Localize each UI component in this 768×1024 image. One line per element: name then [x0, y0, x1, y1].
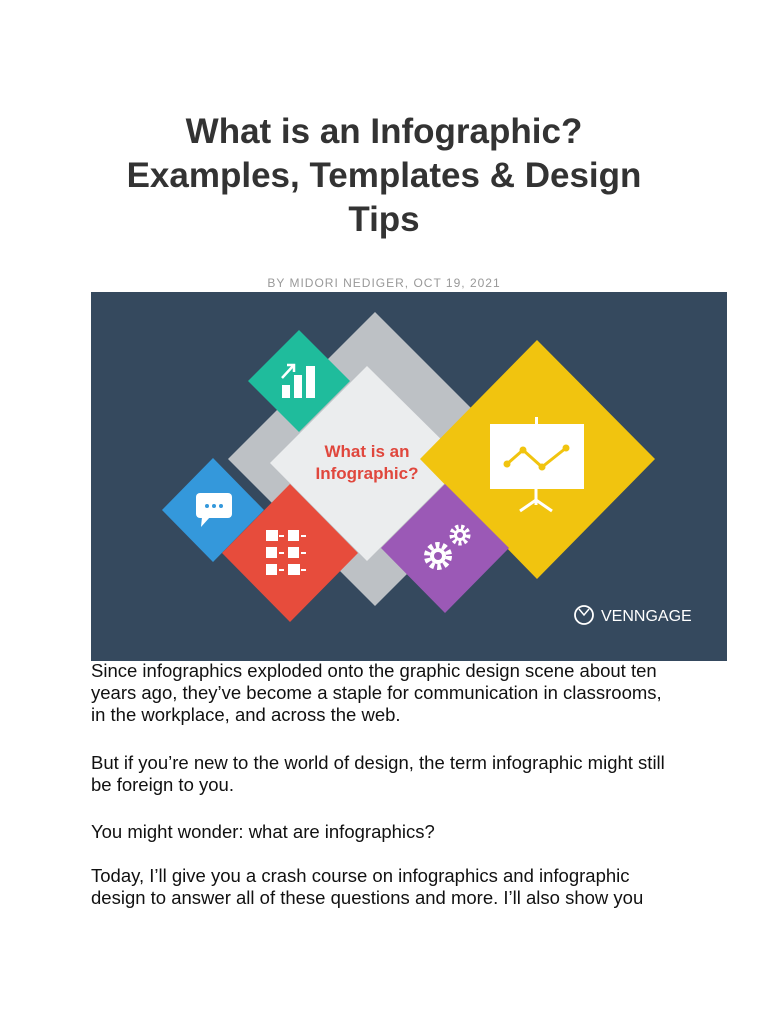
blue diamond with chat icon — [162, 458, 264, 562]
paragraph 3: You might wonder: what are infographics? — [91, 821, 435, 842]
title — [127, 112, 641, 239]
yellow diamond with presentation icon — [420, 340, 655, 579]
byline: BY MIDORI NEDIGER, OCT 19, 2021 — [267, 276, 501, 290]
paragraph 4: Today, I’ll give you a crash course on infographics and infographic design to answer all of these questions and more. I’ll also show you — [91, 865, 643, 908]
venngage logo: VENNGAGE — [601, 608, 692, 625]
title: Tips — [348, 200, 420, 239]
paragraph 2: But if you’re new to the world of design, the term infographic might still be foreign to you. — [91, 752, 665, 795]
paragraph 1: Since infographics exploded onto the graphic design scene about ten years ago, they’ve become a staple for communication in classrooms, in the workplace, and across the web. — [91, 660, 662, 725]
venngage logo — [575, 606, 692, 625]
purple diamond with gears icon — [381, 484, 509, 613]
white diamond with title: Infographic? — [316, 464, 418, 483]
green diamond — [248, 330, 350, 432]
white diamond with title — [270, 366, 465, 561]
gray diamond — [228, 312, 522, 606]
title: Examples, Templates & Design — [127, 156, 641, 195]
white diamond with title: What is an — [324, 442, 410, 461]
red diamond with list icon — [222, 484, 358, 622]
title: What is an Infographic? — [186, 112, 582, 151]
hero banner — [91, 292, 727, 661]
